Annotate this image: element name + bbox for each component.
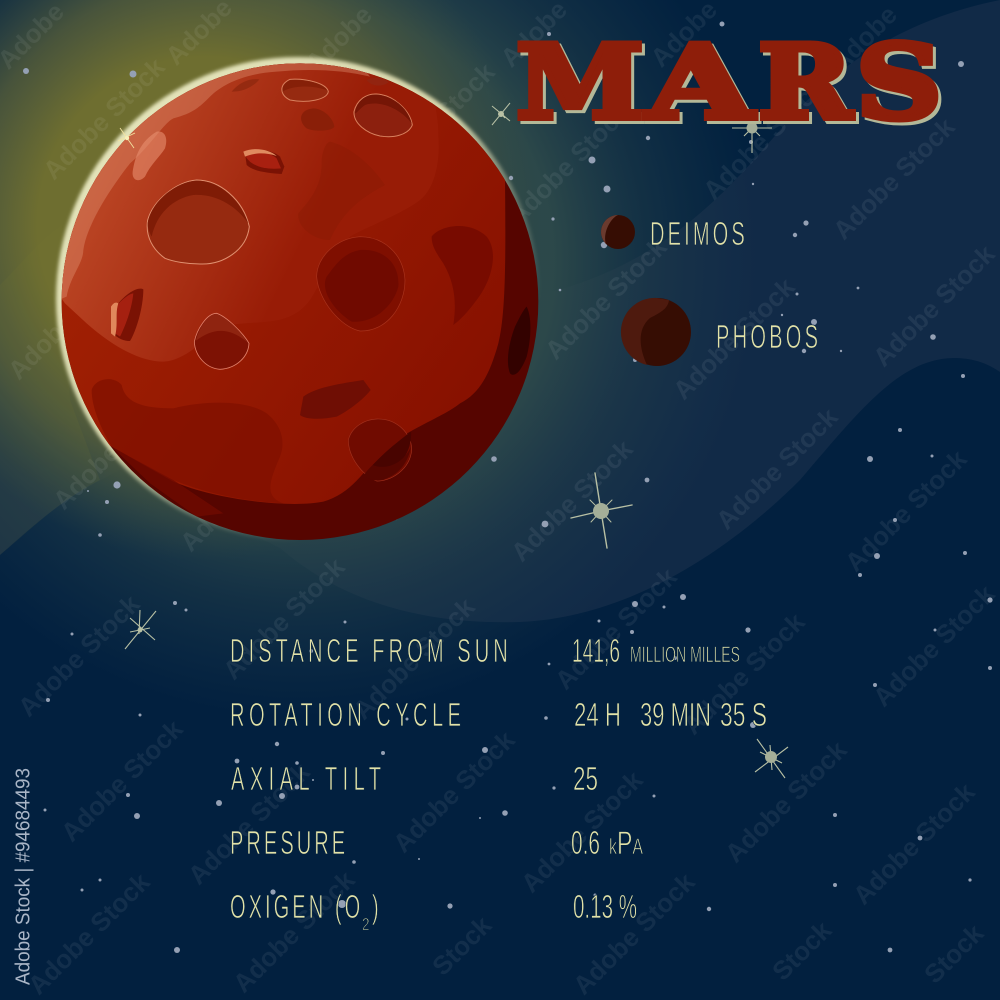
- watermark: Adobe Stock: Stock: [426, 910, 498, 981]
- watermark: Adobe Stock: Adobe Stock: [677, 606, 811, 740]
- watermark: Adobe Stock: Adobe Stock: [22, 866, 156, 1000]
- watermark: Adobe Stock: Adobe Stock: [332, 261, 466, 395]
- watermark: Adobe Stock: Adobe Stock: [567, 866, 701, 1000]
- title shadow: R: [761, 26, 856, 146]
- lower left shaded region: [92, 379, 283, 503]
- title: A: [646, 23, 755, 143]
- shaded patch upper centre: [299, 142, 332, 213]
- watermark: Adobe Stock: Adobe Stock: [839, 443, 973, 577]
- crater lower right: [348, 419, 412, 481]
- watermark: Adobe Stock: Adobe Stock: [207, 226, 341, 360]
- stock credit: Adobe Stock | #94684493: [12, 768, 34, 985]
- watermark: Adobe Stock: Adobe Stock: [827, 111, 961, 245]
- star beside planet: [492, 103, 510, 125]
- row: rotation cycle: 35 S: [720, 697, 767, 734]
- row: oxygen: OXIGEN (O: [230, 888, 360, 925]
- watermark: Adobe Stock: Adobe Stock: [502, 96, 636, 230]
- watermark: Adobe Stock: Adobe Stock: [505, 433, 639, 567]
- mid tone surface: [50, 50, 505, 504]
- moon: Deimos: [601, 215, 635, 249]
- row: axial tilt: 25: [573, 761, 598, 798]
- row: axial tilt: AXIAL TILT: [231, 760, 381, 797]
- dark crater far right: [508, 307, 530, 375]
- watermark: Adobe Stock: Adobe Stock: [867, 238, 1000, 372]
- watermark: Adobe Stock: Adobe Stock: [719, 734, 853, 868]
- row: rotation cycle: 24 H: [574, 697, 621, 734]
- row: distance from sun: DISTANCE FROM SUN: [230, 632, 508, 669]
- planet Mars: [50, 50, 538, 540]
- large crater upper left: [147, 180, 249, 264]
- watermark: Adobe Stock: Stock: [766, 915, 838, 986]
- small dark crater top: [301, 108, 334, 131]
- moon: Phobos: [621, 298, 691, 366]
- spark on planet edge: [118, 128, 135, 148]
- row: oxygen: 2: [362, 915, 370, 935]
- title shadow: A: [649, 26, 758, 146]
- watermark: Adobe Stock: Adobe Stock: [174, 423, 308, 557]
- title shadow: M: [519, 26, 647, 146]
- title: S: [856, 23, 942, 143]
- row: axial tilt: [231, 760, 598, 798]
- watermark: Adobe Stock: Adobe Stock: [667, 271, 801, 405]
- watermark: Adobe Stock: Adobe Stock: [379, 391, 513, 525]
- label: Phobos: PHOBOS: [716, 318, 818, 355]
- dark speck top: [232, 79, 259, 92]
- dark oval crater: [300, 380, 371, 419]
- watermark: Adobe Stock: Adobe Stock: [539, 231, 673, 365]
- watermark: Adobe Stock: Adobe Stock: [162, 91, 296, 225]
- shaded patch right: [432, 226, 493, 325]
- star under title: [732, 112, 772, 153]
- title: M: [516, 23, 644, 143]
- row: pressure: [230, 824, 643, 862]
- darker strip lower edge: [112, 447, 223, 517]
- row: oxygen: 0.13 %: [573, 889, 637, 926]
- watermark: Adobe Stock: Adobe: [824, 0, 903, 78]
- planet rim glow: [56, 57, 540, 541]
- row: pressure: PRESURE: [230, 824, 345, 861]
- watermark: Adobe Stock: Adobe Stock: [2, 251, 136, 385]
- watermark: Adobe Stock: Adobe Stock: [55, 713, 189, 847]
- watermark: Adobe Stock: Adobe Stock: [182, 756, 316, 890]
- row: oxygen: ): [372, 888, 379, 925]
- watermark: Adobe Stock: Adobe Stock: [697, 71, 831, 205]
- row: distance from sun: [230, 632, 740, 670]
- crater top right: [354, 94, 412, 137]
- row: oxygen: [230, 888, 637, 935]
- lit upper region: [50, 50, 439, 362]
- watermark: Adobe Stock: Adobe Stock: [549, 561, 683, 695]
- star right of data: [755, 739, 788, 778]
- row: rotation cycle: 39 MIN: [640, 697, 711, 734]
- title: [516, 23, 942, 143]
- row: distance from sun: 141,6: [572, 633, 620, 670]
- large dark crater centre: [317, 237, 405, 331]
- row: rotation cycle: ROTATION CYCLE: [230, 696, 461, 733]
- highlight patch upper left: [133, 131, 166, 180]
- watermark: Adobe Stock: Adobe Stock: [37, 51, 171, 185]
- watermark: Adobe Stock: Adobe Stock: [515, 764, 649, 898]
- watermark: Adobe Stock: Stock: [918, 918, 990, 989]
- dark speck upper right: [367, 78, 388, 86]
- watermark: Adobe Stock: Adobe Stock: [367, 56, 501, 190]
- crater lower left: [194, 313, 249, 369]
- watermark: Adobe Stock: Adobe Stock: [710, 401, 844, 535]
- row: distance from sun: MILLION MILLES: [630, 642, 740, 667]
- title: R: [758, 23, 853, 143]
- title shadow: S: [859, 26, 945, 146]
- watermark: Adobe Stock: Adobe Stock: [867, 578, 1000, 712]
- title shadow: [519, 26, 945, 146]
- watermark: Adobe Stock: Adobe Stock: [47, 381, 181, 515]
- row: rotation cycle: [230, 696, 767, 734]
- watermark: Adobe Stock: Adobe Stock: [217, 551, 351, 685]
- crater top: [282, 79, 328, 101]
- row: pressure: kPA: [609, 825, 643, 861]
- rock left: [111, 289, 143, 341]
- large star centre: [571, 473, 632, 548]
- label: Deimos: DEIMOS: [650, 215, 745, 252]
- row: pressure: 0.6: [571, 825, 600, 862]
- watermark: Adobe Stock: Adobe Stock: [387, 724, 521, 858]
- bright rim highlight: [62, 64, 370, 298]
- rock upper centre: [243, 149, 284, 174]
- star lower left: [125, 610, 156, 649]
- watermark: Adobe Stock: Adobe Stock: [347, 591, 481, 725]
- watermark: Adobe Stock: Adobe: [299, 0, 378, 78]
- data table: [230, 632, 767, 935]
- watermark: Adobe Stock: Adobe Stock: [847, 776, 981, 910]
- watermark: Adobe Stock: Adobe Stock: [12, 588, 146, 722]
- watermark: Adobe Stock: Adobe Stock: [227, 864, 361, 998]
